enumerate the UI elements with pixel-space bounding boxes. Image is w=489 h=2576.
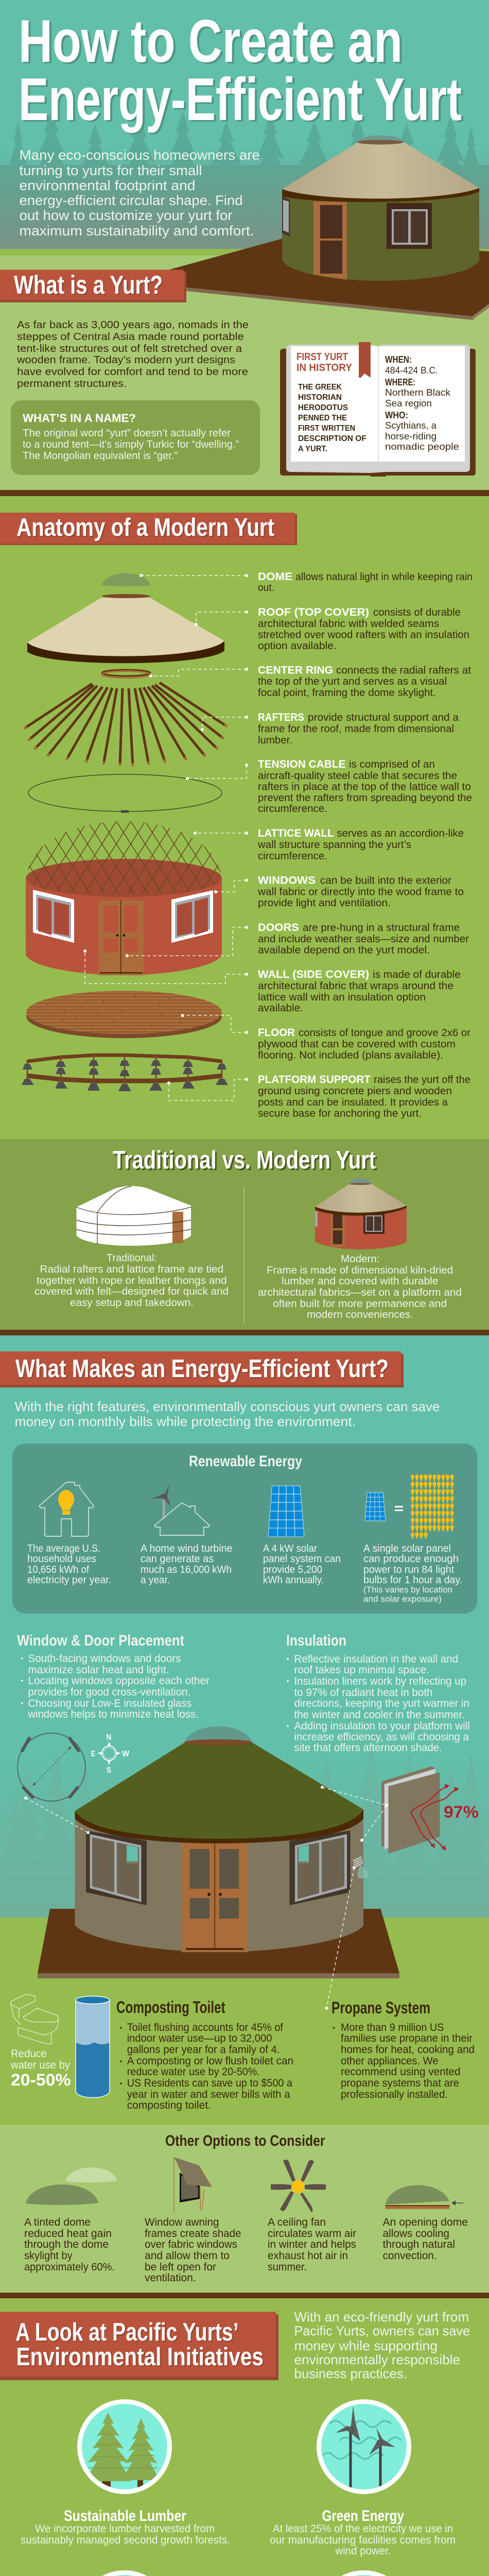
leader lines [83, 574, 248, 1100]
hero yurt [282, 135, 479, 281]
option 1 text: skylight by [24, 2250, 73, 2262]
option 3 text: A ceiling fan [268, 2216, 326, 2228]
roof text: option available. [258, 640, 337, 652]
intro: initiatives: With an eco-friendly yurt from [294, 2309, 469, 2325]
list: propane: More than 9 million US [341, 2022, 444, 2033]
option 1 text: A tinted dome [24, 2216, 91, 2228]
icon: compass: E [91, 1750, 95, 1758]
intro text: out how to customize your yurt for [20, 208, 233, 223]
lattice wall text: LATTICE WALL [258, 827, 334, 839]
list: insulation: increase efficiency, as will choosing a [294, 1731, 469, 1743]
text: traditional: Traditional: [107, 1252, 157, 1264]
text: what is a yurt: As far back as 3,000 years ago, nomads in the [17, 319, 249, 331]
stat 3: provide 5,200 [263, 1564, 322, 1575]
book: first yurt in history: Scythians, a [385, 420, 437, 431]
list: window and door: Locating windows opposite each other [28, 1675, 209, 1687]
ribbon: what makes: What Makes an Energy-Efficient Yurt? [15, 1355, 389, 1383]
text: what is a yurt: permanent structures. [17, 378, 127, 389]
list: composting toilet: Toilet flushing accounts for 45% of [127, 2022, 283, 2033]
roof text: consists of durable [373, 607, 461, 618]
stat: reduce water: water use by [10, 2059, 70, 2071]
doors text: and include weather seals—size and number [258, 934, 469, 945]
title [19, 7, 462, 133]
list: propane: recommend using vented [341, 2066, 460, 2078]
ribbon: what makes [0, 1351, 404, 1387]
floor text: plywood that can be covered with custom [258, 1039, 456, 1050]
list: composting toilet: A composting or low flush toilet can [127, 2055, 293, 2067]
dome text: DOME [258, 571, 292, 583]
sustainable lumber: We incorporate lumber harvested from [35, 2523, 215, 2535]
option 4 text: through natural [383, 2239, 455, 2250]
diagram: wall and lattice [26, 821, 222, 975]
book: first yurt in history: nomadic people [385, 442, 459, 452]
rafters text: provide structural support and a [308, 712, 459, 723]
lattice wall text: wall structure spanning the yurt’s [257, 839, 411, 851]
platform support text: secure base for anchoring the yurt. [258, 1108, 422, 1120]
stat 4: bulbs for 1 hour a day. [363, 1574, 462, 1586]
list: window and door: South-facing windows and doors [28, 1653, 181, 1665]
center ring text: focal point, framing the dome skylight. [258, 687, 436, 699]
panel: what's in a name: to a round tent—it’s simply Turkic for “dwelling.” [23, 439, 239, 450]
icon: trees badge [77, 2399, 172, 2494]
book: first yurt in history: Northern Black [385, 387, 451, 398]
ribbon: environmental initiatives: A Look at Pacific Yurts’ [15, 2318, 239, 2346]
diagram: floor [26, 991, 222, 1038]
windows text [257, 875, 464, 909]
rafters text: lumber. [258, 735, 292, 746]
text: traditional: covered with felt—designed for quick and [34, 1286, 229, 1297]
icon: insulation sheet [381, 1766, 459, 1854]
intro: efficient: money on monthly bills while protecting the environment. [14, 1414, 356, 1429]
option 4 text: convection. [383, 2250, 436, 2262]
list: window and door: windows helps to minimize heat loss. [28, 1708, 199, 1720]
intro text: Many eco-conscious homeowners are [20, 147, 260, 163]
text: what is a yurt: steppes of Central Asia made round portable [17, 331, 244, 343]
left window [86, 1831, 147, 1905]
dome text: allows natural light in while keeping rain [295, 571, 473, 583]
intro: initiatives: environmentally responsible [294, 2352, 460, 2367]
book: first yurt in history: PENNED THE [298, 414, 347, 422]
book: first yurt in history: WHERE: [385, 377, 415, 387]
stat 2: much as 16,000 kWh [141, 1564, 232, 1575]
sustainable lumber: sustainably managed second growth forests. [21, 2534, 230, 2546]
option 1 text: through the dome [24, 2239, 109, 2250]
lattice wall text [257, 827, 464, 862]
list: insulation: site that offers afternoon shade. [294, 1742, 442, 1754]
book: first yurt in history: WHEN: [385, 354, 412, 365]
book: first yurt in history: HERODOTUS [298, 403, 348, 412]
book: first yurt in history: A YURT. [298, 445, 327, 453]
center ring text: CENTER RING [258, 665, 333, 676]
list: propane: families use propane in their [341, 2032, 473, 2044]
heading: composting toilet: Composting Toilet [116, 1998, 225, 2016]
wall text: available. [258, 1003, 303, 1014]
list: composting toilet: gallons per year for a family of 4. [127, 2044, 280, 2056]
book: first yurt in history: FIRST WRITTEN [298, 424, 355, 433]
list: insulation: Adding insulation to your platform will [294, 1720, 470, 1732]
wall text [258, 969, 461, 1014]
list: propane: professionally installed. [341, 2089, 448, 2100]
dome text: out. [258, 582, 274, 594]
option 3 text: summer. [268, 2261, 307, 2273]
ground bands [0, 249, 489, 490]
roof text: ROOF (TOP COVER) [258, 606, 369, 618]
stat: reduce water [10, 2048, 71, 2089]
option 2 text: and allow them to [145, 2250, 230, 2262]
heat arrows [411, 1786, 457, 1850]
stat 4: can produce enough [363, 1553, 459, 1565]
wall text: architectural fabric that wraps around the [258, 980, 453, 992]
icon: compass: W [122, 1750, 130, 1758]
roof text: stretched over wood rafters with an insulation [258, 630, 469, 641]
stat: reduce water: 20-50% [11, 2071, 71, 2089]
option 2 text: frames create shade [145, 2228, 241, 2240]
list: insulation: the winter and cooler in the summer. [294, 1709, 465, 1721]
stat 4: (This varies by location [363, 1585, 452, 1595]
list: window and door: provides for good cross-ventilation. [28, 1686, 190, 1698]
list: composting toilet: composting toilet. [127, 2099, 211, 2111]
doors text: DOORS [258, 922, 299, 934]
icon: traditional yurt [76, 1186, 191, 1246]
icon: solar panel [268, 1486, 304, 1537]
icon: tinted dome [26, 2167, 117, 2205]
intro: initiatives: business practices. [294, 2366, 407, 2381]
tension cable text: prevent the rafters from spreading beyond the [258, 792, 472, 804]
stat 1: 10,656 kWh of [27, 1564, 89, 1575]
floor text [258, 1027, 470, 1061]
intro: initiatives [294, 2309, 470, 2381]
stat 3: panel system can [263, 1553, 341, 1565]
icon: propane vent [353, 1857, 369, 1878]
floor text: FLOOR [258, 1027, 295, 1039]
diagram: roof [27, 594, 224, 663]
icon: modern yurt [315, 1178, 407, 1249]
option 3 text [268, 2216, 356, 2273]
doors text: are pre-hung in a structural frame [303, 922, 460, 934]
book: first yurt in history: FIRST YURT [296, 351, 348, 363]
icon: water cylinder [76, 1996, 110, 2098]
tension cable text: circumference. [258, 803, 327, 815]
stat 4 [363, 1543, 462, 1604]
text: what is a yurt: wooden frame. Today’s modern yurt designs [16, 354, 235, 366]
stat 2: A home wind turbine [141, 1543, 233, 1554]
icon: ceiling fan [271, 2160, 326, 2212]
platform support text [258, 1074, 470, 1120]
option 4 text: An opening dome [383, 2216, 468, 2228]
option 2 text: over fabric windows [145, 2239, 237, 2250]
intro text: energy-efficient circular shape. Find [20, 193, 243, 208]
center ring text [258, 665, 471, 699]
tension cable text: aircraft-quality steel cable that secures the [258, 770, 457, 782]
windows text: can be built into the exterior [320, 875, 451, 887]
diagram: platform support [22, 1054, 228, 1091]
book: first yurt in history: 484-424 B.C. [385, 365, 438, 376]
list: propane: other appliances. We [341, 2055, 439, 2067]
sustainable lumber [21, 2507, 230, 2546]
list: insulation: directions, keeping the yurt warmer in [294, 1698, 469, 1709]
stat: reduce water: Reduce [11, 2048, 47, 2060]
icon: truck badge [342, 2570, 386, 2576]
text: traditional: easy setup and takedown. [70, 1297, 194, 1309]
intro: efficient: With the right features, environmentally conscious yurt owners can save [14, 1399, 440, 1414]
intro: initiatives: Pacific Yurts, owners can save [294, 2323, 470, 2338]
option 4 text [383, 2216, 468, 2262]
option 2 text: be left open for [145, 2261, 216, 2273]
icon: wind badge [317, 2399, 411, 2494]
option 1 text: approximately 60%. [24, 2261, 115, 2273]
windows text: provide light and ventilation. [258, 897, 391, 909]
text: modern: Modern: [341, 1253, 380, 1265]
text: modern: modern conveniences. [307, 1309, 413, 1320]
book: first yurt in history: WHO: [385, 410, 408, 420]
platform support text: ground using concrete piers and wooden [258, 1086, 452, 1097]
icon: house with wind turbine [151, 1484, 209, 1535]
platform support text: PLATFORM SUPPORT [258, 1074, 371, 1086]
diagram: tension cable [28, 774, 222, 813]
anatomy descriptions [257, 571, 473, 1120]
lattice wall text: circumference. [258, 851, 327, 862]
tension cable text: rafters in place at the top of the lattice wall to [258, 781, 471, 792]
intro: efficient [14, 1399, 440, 1429]
heading: traditional vs modern: Traditional vs. Modern Yurt [113, 1146, 376, 1174]
list: composting toilet: reduce water use by 20-50%. [127, 2066, 260, 2078]
roof text: architectural fabric with welded seams [258, 618, 439, 630]
stat 2: a year. [141, 1574, 170, 1586]
book: first yurt in history: Sea region [385, 398, 432, 409]
intro text: maximum sustainability and comfort. [20, 223, 254, 239]
tension cable text: TENSION CABLE [258, 758, 346, 770]
list: composting toilet: year in water and sewer bills with a [127, 2089, 290, 2100]
book: first yurt in history [280, 342, 476, 477]
option 2 text: ventilation. [145, 2272, 196, 2284]
text: modern: architectural fabrics—set on a platform and [258, 1287, 462, 1298]
icon: ventilation ring diagram [18, 1733, 85, 1801]
stat 2: can generate as [141, 1553, 214, 1565]
platform: hero [170, 237, 489, 320]
rafters text: RAFTERS [258, 711, 304, 723]
green energy: Green Energy [322, 2507, 404, 2524]
roof text [258, 606, 469, 652]
icon: house with bulb [39, 1482, 94, 1536]
diagram: center ring [102, 670, 150, 678]
icon: compass: N [106, 1733, 111, 1742]
book: first yurt in history: IN HISTORY [296, 362, 353, 374]
list: propane [333, 2022, 475, 2100]
leader lines: efficient [24, 1786, 388, 2010]
heading: propane system: Propane System [331, 1998, 430, 2017]
lattice wall text: serves as an accordion-like [337, 828, 464, 839]
list: window and door: maximize solar heat and light. [28, 1664, 169, 1676]
list: insulation [287, 1653, 470, 1754]
text: what is a yurt: have evolved for comfort and tend to be more [17, 366, 248, 378]
stat 4: power to run 84 light [363, 1564, 454, 1575]
text: modern: Frame is made of dimensional kiln-dried [267, 1265, 453, 1276]
diagram: dome [102, 573, 150, 586]
option 1 text [24, 2216, 115, 2273]
intro: initiatives: money while supporting [294, 2338, 438, 2353]
list: insulation: Reflective insulation in the wall and [294, 1653, 458, 1665]
panel: what's in a name: The original word “yurt” doesn’t actually refer [23, 428, 231, 439]
big yurt cutaway [75, 1726, 363, 1952]
header background [0, 0, 489, 249]
list: composting toilet: US Residents can save up to $500 a [127, 2077, 292, 2089]
heading: other options: Other Options to Consider [165, 2132, 325, 2149]
doors text: available depend on the yurt model. [258, 945, 430, 956]
ribbon: environmental initiatives [0, 2312, 278, 2380]
text: traditional: together with rope or leather thongs and [37, 1275, 227, 1286]
stat 4: and solar exposure) [363, 1594, 442, 1604]
stat 3: kWh annually. [263, 1574, 324, 1586]
list: window and door [21, 1653, 209, 1720]
list: composting toilet: indoor water use—up to 32,000 [127, 2032, 272, 2044]
right window [289, 1831, 351, 1905]
green energy: our manufacturing facilities comes from [270, 2534, 456, 2546]
green energy: At least 25% of the electricity we use in [273, 2523, 453, 2535]
windows text: wall fabric or directly into the wood frame to [257, 887, 464, 898]
tension cable text: is comprised of an [349, 759, 435, 770]
windows text: WINDOWS [258, 875, 316, 887]
stat 1: electricity per year. [27, 1574, 111, 1586]
option 2 text [145, 2216, 241, 2284]
book: first yurt in history: HISTORIAN [298, 393, 342, 402]
text: modern: lumber and covered with durable [282, 1276, 439, 1287]
panel: what's in a name [11, 400, 260, 475]
panel: renewable energy [12, 1444, 477, 1614]
intro text: environmental footprint and [20, 178, 195, 193]
option 4 text: allows cooling [383, 2228, 449, 2240]
list: window and door: Choosing our Low-E insulated glass [28, 1698, 191, 1709]
rafters text: frame for the roof, made from dimensional [258, 723, 454, 735]
dome text [258, 571, 473, 594]
floor text: flooring. Not included (plans available). [258, 1050, 443, 1061]
platform support text: posts and can be insulated. It provides a [258, 1097, 448, 1108]
ribbon: environmental initiatives: Environmental Initiatives [16, 2343, 264, 2371]
icon: measuring badge [102, 2570, 147, 2576]
sustainable lumber: Sustainable Lumber [64, 2507, 186, 2524]
stat 3 [263, 1543, 341, 1586]
section background: anatomy [0, 490, 489, 1335]
rafters text [258, 711, 459, 746]
section background: efficient [0, 1335, 489, 2576]
list: insulation: roof takes up minimal space. [294, 1664, 429, 1676]
ribbon: anatomy: Anatomy of a Modern Yurt [16, 514, 274, 541]
panel: what's in a name: The Mongolian equivalent is “ger.” [23, 450, 178, 462]
intro text: turning to yurts for their small [20, 163, 202, 178]
text: traditional [34, 1252, 229, 1309]
stat 3: A 4 kW solar [263, 1543, 317, 1554]
icon: compass [91, 1733, 130, 1775]
ribbon: what is a yurt: What is a Yurt? [14, 270, 163, 299]
option 1 text: reduced heat gain [24, 2228, 112, 2240]
text: what is a yurt: tent-like structures out of felt stretched over a [17, 343, 242, 354]
stat 1 [27, 1543, 111, 1586]
list: insulation: Insulation liners work by reflecting up [294, 1675, 466, 1687]
stat 1: household uses [27, 1553, 96, 1565]
diagram: rafters [24, 683, 227, 766]
option 3 text: exhaust hot air in [268, 2250, 348, 2262]
center ring text: the top of the yurt and serves as a visual [258, 676, 447, 687]
list: propane: propane systems that are [341, 2077, 459, 2089]
stat: 97 percent: 97% [444, 1803, 479, 1821]
text: what is a yurt [16, 319, 249, 389]
platform support text: raises the yurt off the [374, 1074, 470, 1086]
text: modern [258, 1253, 462, 1320]
list: insulation: to 97% of radiant heat in both [294, 1687, 432, 1699]
text: modern: often built for more permanence and [273, 1298, 447, 1310]
wall text: WALL (SIDE COVER) [258, 969, 369, 980]
text: traditional: Radial rafters and lattice frame are tied [40, 1264, 223, 1275]
floor text: consists of tongue and groove 2x6 or [299, 1027, 470, 1039]
book: first yurt in history: horse-riding [385, 431, 436, 442]
platform: big yurt [38, 1909, 399, 1978]
tension cable text [258, 758, 472, 815]
option 2 text: Window awning [145, 2216, 219, 2228]
doors text [258, 922, 469, 956]
green energy [270, 2507, 456, 2557]
intro text [20, 147, 260, 239]
icon: small solar panel equals bulbs [365, 1475, 455, 1539]
wall text: lattice wall with an insulation option [258, 992, 426, 1003]
stat 2 [141, 1543, 233, 1586]
book: first yurt in history: THE GREEK [298, 383, 342, 392]
panel: what's in a name: WHAT’S IN A NAME? [23, 412, 136, 425]
list: composting toilet [120, 2022, 293, 2111]
heading: insulation: Insulation [286, 1632, 346, 1649]
stat 4: A single solar panel [363, 1543, 451, 1554]
wall text: is made of durable [373, 969, 461, 980]
center ring text: connects the radial rafters at [336, 665, 471, 676]
icon: window awning [174, 2157, 212, 2213]
option 3 text: in winter and helps [268, 2239, 356, 2250]
panel heading: Renewable Energy [189, 1453, 302, 1470]
icon: compass: S [107, 1766, 111, 1775]
heading: window and door: Window & Door Placement [17, 1632, 184, 1649]
stat 1: The average U.S. [27, 1543, 100, 1554]
list: propane: homes for heat, cooking and [341, 2044, 475, 2056]
door [182, 1841, 248, 1952]
option 3 text: circulates warm air [268, 2228, 356, 2240]
roof [75, 1809, 363, 1843]
icon: opening dome [385, 2185, 463, 2209]
book: first yurt in history: DESCRIPTION OF [298, 434, 366, 443]
icon: toilet [11, 1994, 58, 2044]
green energy: wind power. [335, 2545, 391, 2557]
